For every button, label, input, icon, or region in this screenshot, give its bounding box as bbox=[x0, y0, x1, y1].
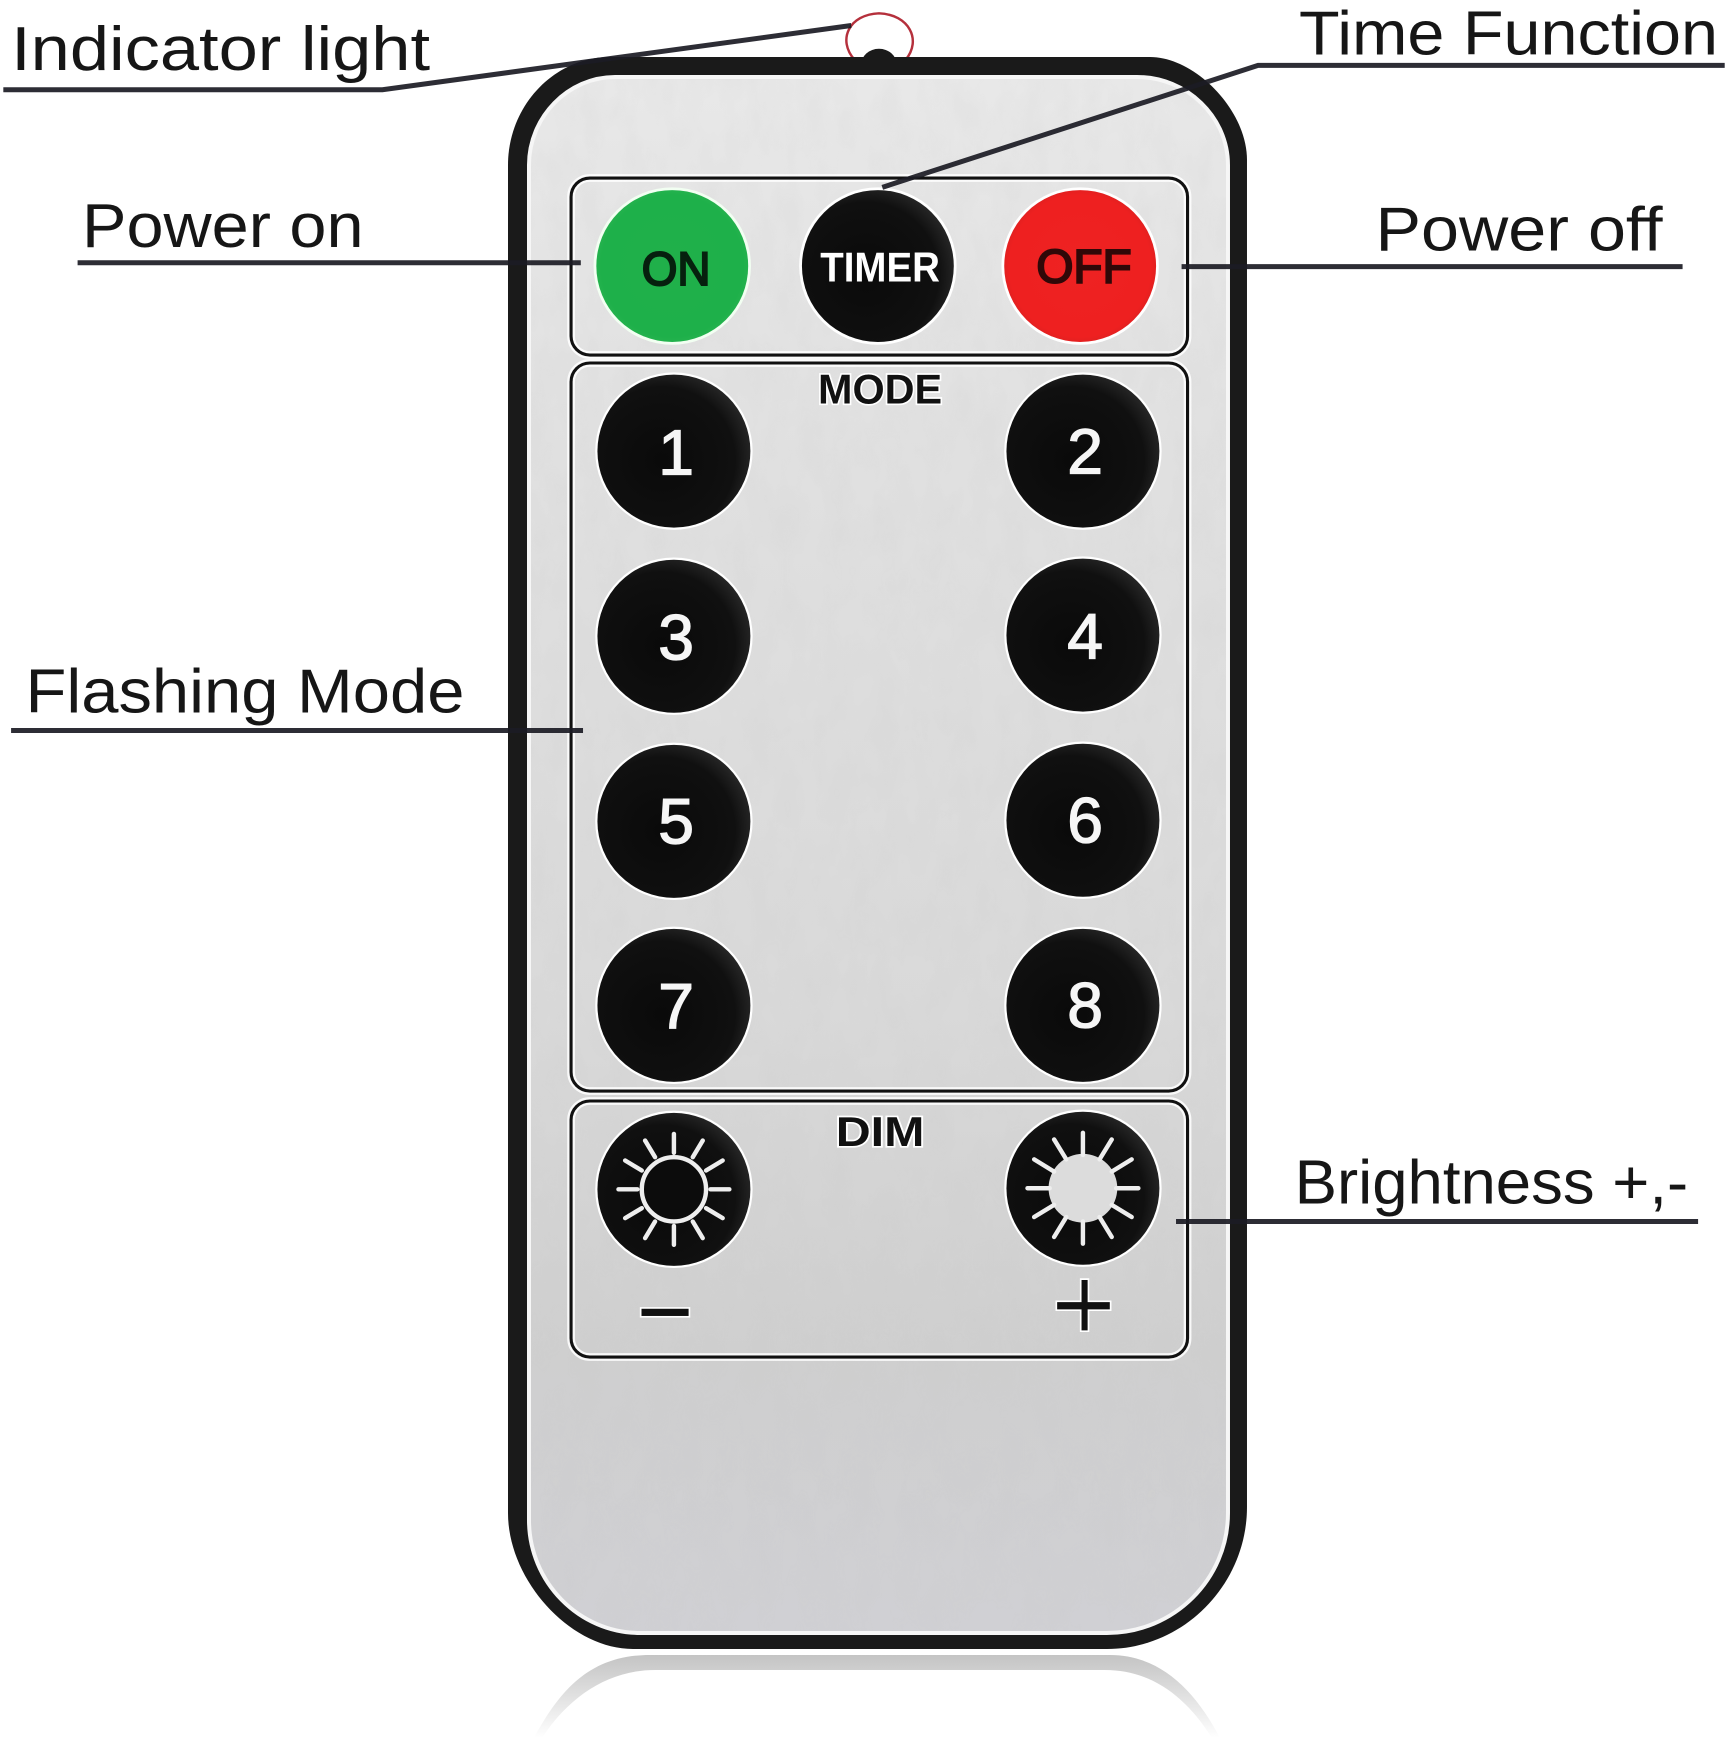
button 4 bbox=[1004, 556, 1162, 714]
plus sign bbox=[1056, 1279, 1111, 1331]
label: Power off: Power off bbox=[1376, 196, 1663, 265]
remote body bbox=[508, 57, 1247, 1649]
button 7 bbox=[595, 927, 753, 1084]
indicator light bump bbox=[861, 49, 897, 80]
minus sign bbox=[641, 1308, 689, 1317]
label: Flashing Mode: Flashing Mode bbox=[25, 658, 464, 727]
button: ON bbox=[594, 187, 751, 345]
remote casing bbox=[508, 57, 1247, 1649]
button 8: 8 bbox=[1067, 970, 1103, 1042]
button 8 bbox=[1004, 927, 1162, 1084]
leader line: brightness bbox=[1176, 1219, 1698, 1224]
button 3 bbox=[595, 558, 753, 715]
button: ON: ON bbox=[642, 243, 710, 296]
leader line: power on bbox=[78, 260, 581, 265]
button 1: 1 bbox=[658, 416, 694, 488]
label: Power on: Power on bbox=[82, 192, 364, 261]
panel: mode buttons bbox=[571, 363, 1188, 1091]
button 6: 6 bbox=[1067, 784, 1103, 856]
button 2 bbox=[1004, 372, 1162, 530]
button: TIMER bbox=[799, 187, 957, 345]
brushed metal face bbox=[529, 77, 1228, 1633]
button: brightness down bbox=[595, 1111, 753, 1268]
button: OFF bbox=[1001, 187, 1159, 345]
leader line: power off bbox=[1182, 264, 1683, 269]
leader line: time function bbox=[882, 65, 1725, 187]
button: OFF: OFF bbox=[1036, 241, 1132, 294]
DIM label: DIM bbox=[836, 1108, 924, 1155]
panel: power buttons bbox=[571, 178, 1188, 355]
label: Brightness +,-: Brightness +,- bbox=[1295, 1149, 1688, 1218]
leader line: indicator light bbox=[3, 25, 851, 90]
button 1 bbox=[595, 372, 753, 530]
indicator light red circle bbox=[846, 13, 913, 60]
MODE label: MODE bbox=[818, 365, 942, 412]
button 6 bbox=[1004, 742, 1162, 899]
leader line: flashing mode bbox=[11, 728, 583, 733]
label: Time Function: Time Function bbox=[1299, 0, 1718, 68]
button: TIMER: TIMER bbox=[820, 244, 940, 291]
label: Indicator light: Indicator light bbox=[11, 15, 430, 84]
panel: dim buttons bbox=[571, 1101, 1188, 1357]
button 5: 5 bbox=[658, 786, 694, 858]
button 4: 4 bbox=[1067, 600, 1103, 672]
button 3: 3 bbox=[658, 602, 694, 674]
button 7: 7 bbox=[658, 971, 694, 1043]
button 5 bbox=[595, 743, 753, 900]
button: brightness up bbox=[1004, 1110, 1162, 1267]
reflection under remote bbox=[534, 1655, 1220, 1738]
brushed metal texture bbox=[531, 79, 1226, 1631]
button 2: 2 bbox=[1067, 415, 1103, 487]
